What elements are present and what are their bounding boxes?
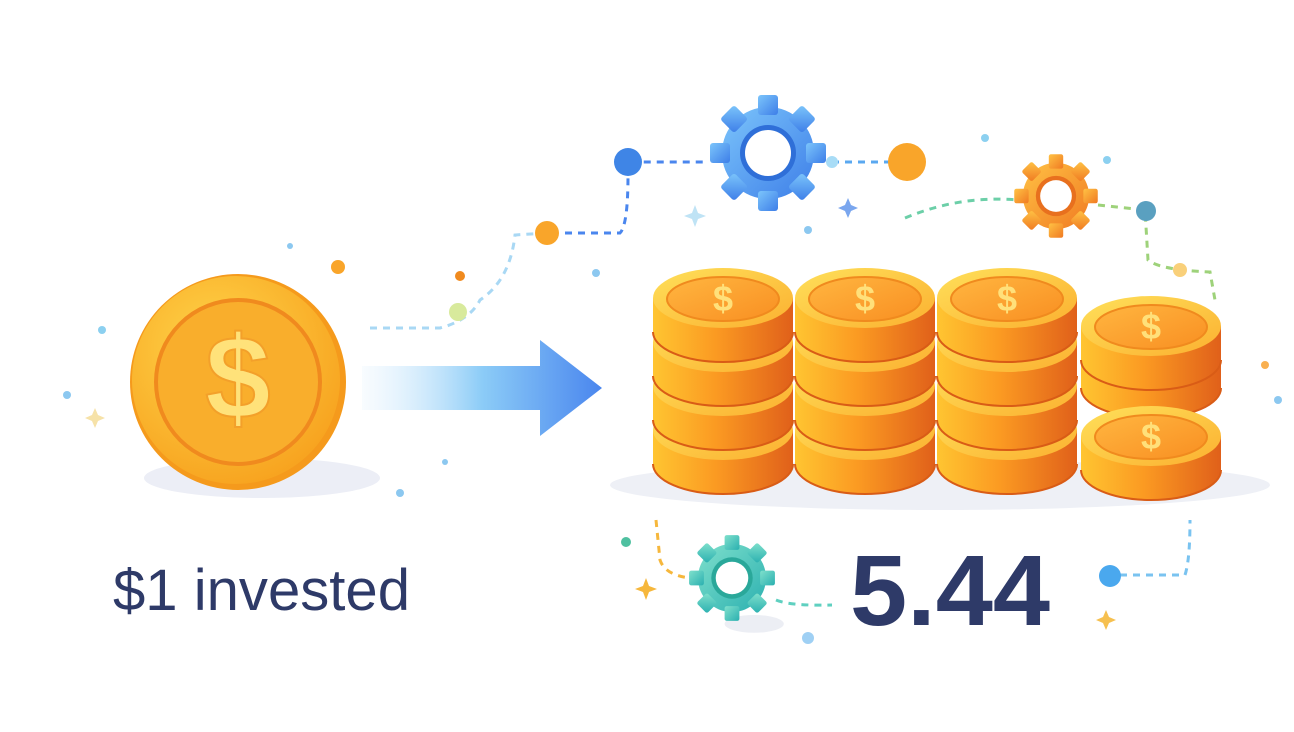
single coin: $ — [205, 312, 271, 444]
arrow — [362, 340, 602, 436]
label: $1 invested: $1 invested — [113, 558, 410, 623]
gear: blue — [710, 95, 826, 211]
gear: orange — [1014, 154, 1098, 238]
gear: teal — [689, 535, 784, 633]
background dots and connectors — [63, 134, 1282, 644]
value: 5.44: 5.44 — [850, 535, 1050, 647]
single coin — [130, 274, 380, 498]
coin stacks — [610, 268, 1270, 510]
